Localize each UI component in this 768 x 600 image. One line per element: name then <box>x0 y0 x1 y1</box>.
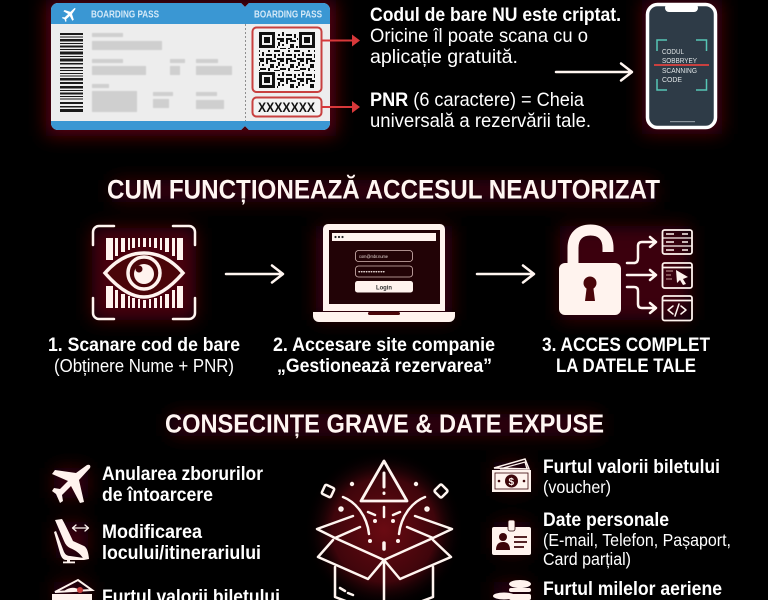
item: change seat: locului/itinerariului <box>102 543 261 564</box>
PNR text <box>370 89 591 132</box>
QR code <box>252 28 322 92</box>
boarding pass: BOARDING PASS <box>254 10 322 20</box>
step 2 label: „Gestionează rezervarea” <box>277 355 492 377</box>
icon: browser cursor <box>662 263 692 288</box>
item: change seat: Modificarea <box>102 522 202 543</box>
warning triangle <box>361 461 407 501</box>
heading: consequences: CONSECINȚE GRAVE & DATE EXPUSE <box>165 408 604 438</box>
pass header text: BOARDING PASS <box>91 10 159 20</box>
boarding pass <box>51 3 330 130</box>
item: personal data: (E-mail, Telefon, Pașaport, <box>543 530 731 550</box>
burst lines <box>343 497 425 534</box>
phone scanning code: SCANNING <box>662 68 697 75</box>
red arrow to barcode text <box>322 34 360 46</box>
icon: server <box>662 230 692 254</box>
item: change seat <box>102 522 261 564</box>
icon: money <box>492 459 531 492</box>
box sparkle dots <box>350 482 418 543</box>
item: ticket value right: (voucher) <box>543 477 611 497</box>
login fields: com@mbr.nume <box>359 254 388 259</box>
step 3 label <box>542 334 710 377</box>
barcode warning text <box>370 4 621 68</box>
white arrow to phone <box>556 64 632 80</box>
icon: open box with warning <box>317 461 452 600</box>
item: ticket value right: Furtul valorii biletului <box>543 457 720 478</box>
item: air miles: Furtul milelor aeriene <box>543 579 722 600</box>
item: personal data <box>543 510 731 569</box>
login fields <box>355 250 413 292</box>
linear barcode <box>60 33 83 112</box>
PNR text: PNR (6 caractere) = Cheia <box>370 89 584 111</box>
step 1 label <box>48 334 240 376</box>
item: cancel flights: Anularea zborurilor <box>102 464 264 485</box>
login fields: ••••••••••• <box>358 270 385 276</box>
icon: ticket cash <box>52 580 92 600</box>
icon: seat with arrow <box>54 519 89 563</box>
step 1 label: (Obținere Nume + PNR) <box>54 355 234 376</box>
item: ticket value right <box>543 457 720 497</box>
floating shapes <box>321 484 335 498</box>
heading: how it works: CUM FUNCȚIONEAZĂ ACCESUL NEAUTORIZAT <box>107 174 660 204</box>
icon: plane <box>52 465 90 503</box>
item: cancel flights <box>102 464 264 506</box>
step 2 label: 2. Accesare site companie <box>273 334 495 356</box>
phone scanning code <box>648 4 716 128</box>
barcode warning text: Oricine îl poate scana cu o <box>370 25 588 47</box>
step 3 icon: open padlock <box>559 230 621 315</box>
step 3 label: LA DATELE TALE <box>556 355 696 377</box>
phone scanning code: CODUL <box>662 49 684 56</box>
step 1 icon: eye over barcode <box>93 226 195 319</box>
icon: code window <box>662 296 692 320</box>
step 3 label: 3. ACCES COMPLET <box>542 334 710 356</box>
item: personal data: Date personale <box>543 510 669 531</box>
phone scanning code: SOBBRYEY <box>662 58 697 65</box>
PNR box: XXXXXXX <box>258 99 316 115</box>
login fields: Login <box>376 284 392 292</box>
step 2 icon: laptop login <box>313 224 455 322</box>
step 1 label: 1. Scanare cod de bare <box>48 334 240 356</box>
phone scanning code: CODE <box>662 77 682 84</box>
item: personal data: Card parțial) <box>543 549 631 569</box>
arrow 2 to 3 <box>477 266 534 282</box>
arrow 1 to 2 <box>226 266 283 282</box>
blurred ticket fields <box>92 33 232 112</box>
box flaps and body <box>317 516 452 538</box>
barcode warning text: Codul de bare NU este criptat. <box>370 4 621 26</box>
icon: coins <box>493 580 531 600</box>
step 2 label <box>273 334 495 377</box>
item: cancel flights: de întoarcere <box>102 485 213 506</box>
icon: money: $ <box>508 477 514 488</box>
connector arrows to data <box>627 237 656 313</box>
plane icon on pass <box>62 8 75 22</box>
icon: ID badge <box>492 520 531 555</box>
barcode warning text: aplicație gratuită. <box>370 46 518 68</box>
box glow <box>304 450 464 600</box>
PNR text: universală a rezervării tale. <box>370 110 591 132</box>
red arrow to PNR text <box>322 101 360 113</box>
